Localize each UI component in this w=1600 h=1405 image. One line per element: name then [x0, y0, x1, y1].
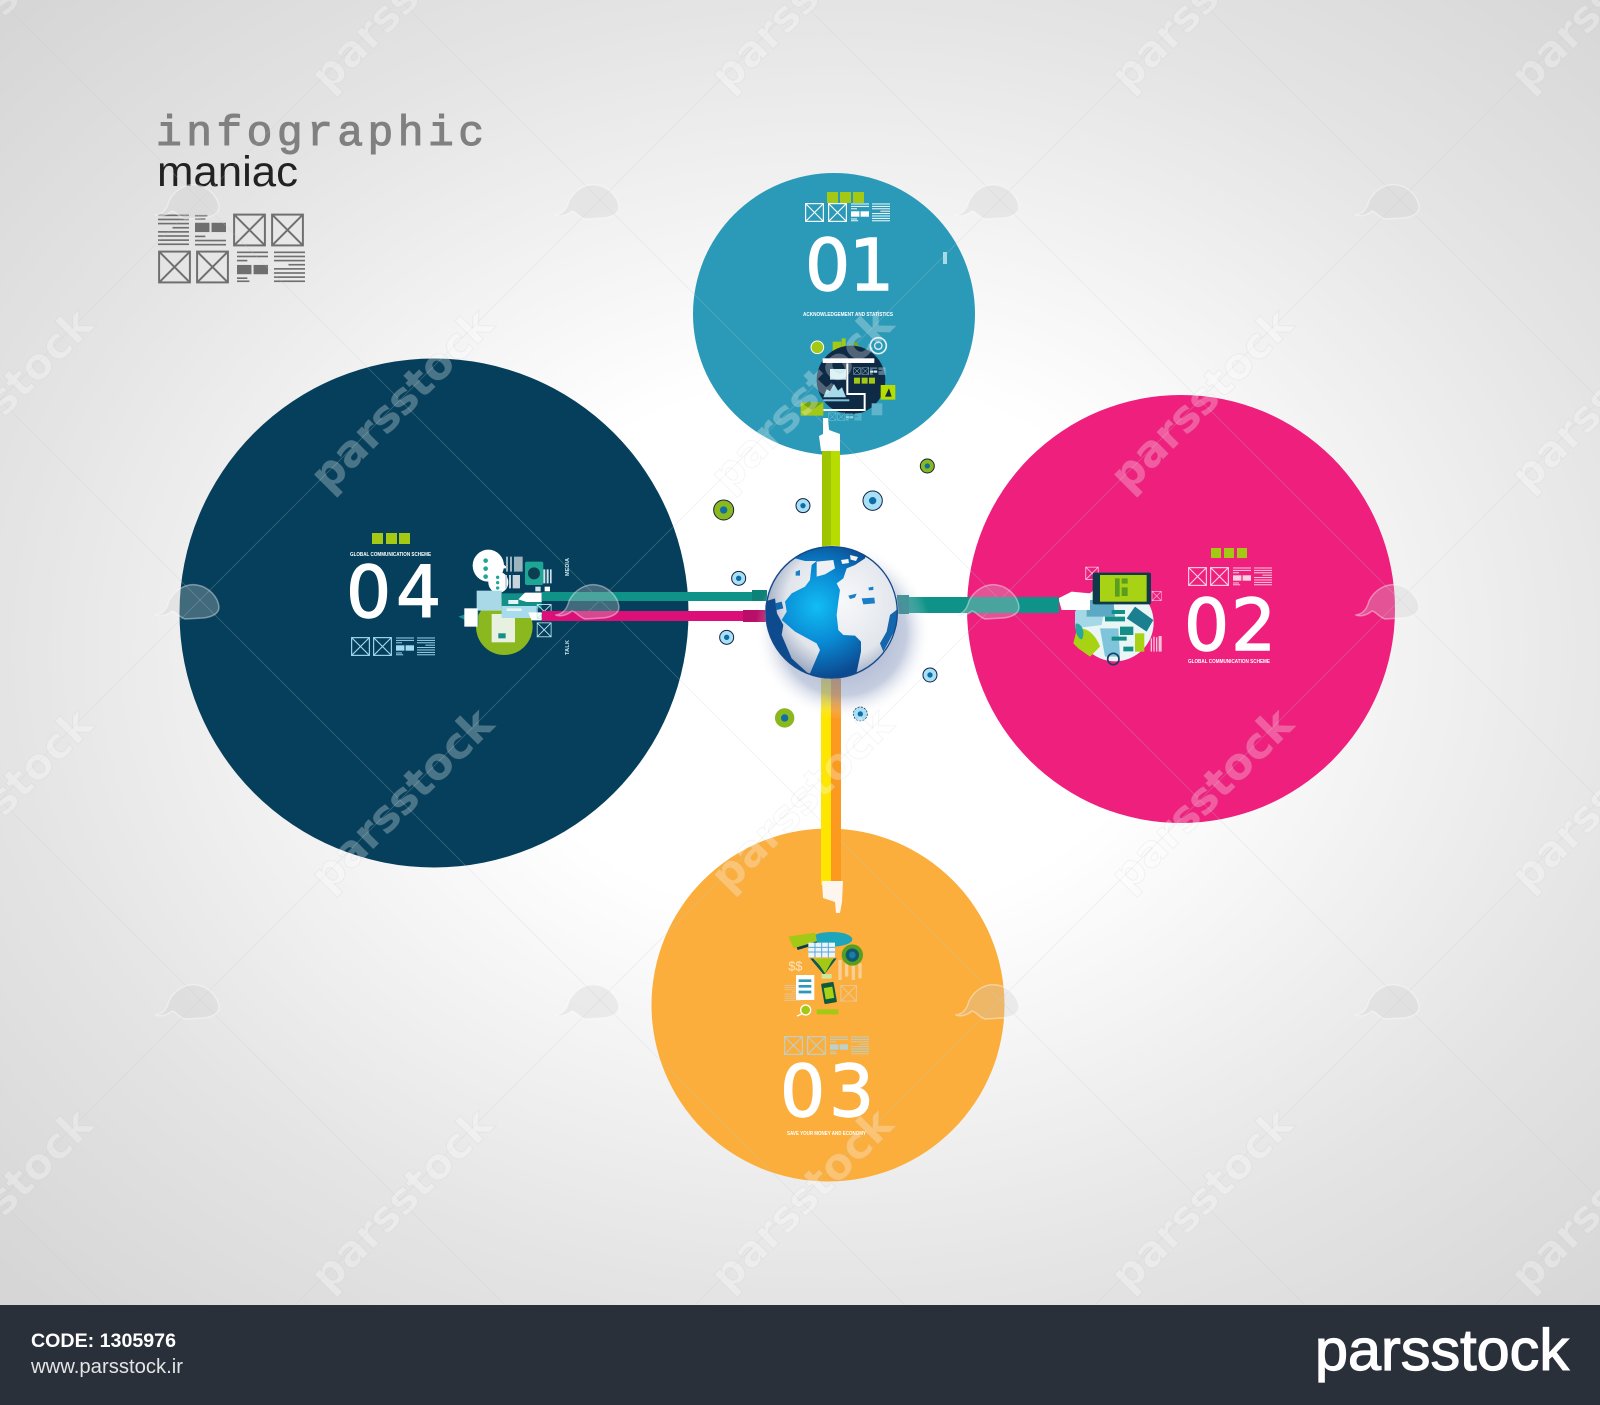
number 03: 3 [829, 1050, 874, 1133]
footer code: CODE: 1305976 [31, 1331, 176, 1352]
watermark: parsstock text: parsstock [301, 698, 504, 901]
panel: circle 02 [967, 395, 1395, 823]
globe shadow [755, 544, 931, 720]
globe [755, 544, 931, 720]
label: TALK: TALK [565, 640, 571, 655]
number 02: 2 [1231, 584, 1276, 667]
content: circle 02 [897, 548, 1276, 667]
watermark: parsstock text: parsstock [1101, 698, 1304, 901]
number 01: 1 [849, 224, 894, 307]
caption: ACKNOWLEDGEMENT AND STATISTICS [803, 312, 893, 318]
panel: circle 04 [180, 358, 688, 868]
panel: circle 01 [693, 173, 975, 455]
content: circle 01 [801, 192, 947, 451]
dot: blue bottom [853, 707, 867, 721]
icon: pointing hand up [819, 418, 840, 451]
globe sphere [764, 545, 898, 680]
dot: blue lower right [923, 668, 937, 682]
dot: blue lower left [720, 630, 734, 644]
connector: yellow and orange bar down [821, 675, 841, 885]
icon cluster: finance: $$ [788, 960, 802, 974]
icon cluster: charts on dark circle [801, 338, 895, 420]
caption: GLOBAL COMMUNICATION SCHEME [350, 552, 431, 558]
watermark: parsstock text: parsstock [701, 698, 904, 901]
green squares [372, 533, 410, 544]
icon cluster: media [458, 550, 552, 655]
watermark: parsstock text: parsstock [701, 1098, 904, 1301]
icon: teal sleeve and bar [897, 595, 1059, 614]
panel: circle 03 [652, 828, 1004, 1182]
label: MEDIA: MEDIA [565, 558, 571, 576]
dot: blue large [863, 491, 882, 510]
dot: green small [920, 459, 934, 473]
tick [943, 252, 947, 264]
title: infographic maniac [156, 109, 484, 196]
decorative dots [714, 459, 937, 728]
content: circle 04 [346, 533, 571, 655]
green squares [1211, 548, 1247, 558]
wireframe row [352, 638, 435, 655]
watermark: parsstock text: parsstock [1101, 298, 1304, 501]
green squares [827, 192, 864, 203]
icon cluster: finance [784, 932, 863, 1016]
dot: blue [796, 499, 810, 513]
number 02: 0 [1184, 584, 1229, 667]
footer url: www.parsstock.ir [30, 1356, 183, 1378]
watermark: parsstock text: parsstock [1101, 1098, 1304, 1301]
watermark: parsstock text: parsstock [301, 298, 504, 501]
connector: green bar up [822, 450, 840, 550]
dot: blue left [732, 571, 746, 585]
dot: green bottom [775, 708, 795, 728]
connector: teal and pink bars left [542, 590, 767, 622]
title line: maniac: maniac [157, 148, 298, 196]
wireframe row [806, 204, 890, 221]
watermark: parsstock text: parsstock [701, 298, 904, 501]
number 04: 4 [396, 551, 441, 634]
content: circle 03 [780, 881, 874, 1137]
icon cluster: globe and tablet [1058, 567, 1162, 665]
wireframe icon grid [158, 214, 305, 282]
watermark: parsstock text: parsstock [301, 1098, 504, 1301]
wireframe row [785, 1036, 869, 1054]
caption: GLOBAL COMMUNICATION SCHEME [1188, 659, 1270, 665]
caption: SAVE YOUR MONEY AND ECONOMY [787, 1131, 866, 1137]
number 04: 0 [346, 551, 391, 634]
wireframe row [1189, 568, 1272, 585]
dot: green [714, 500, 734, 520]
title line: infographic: infographic [156, 109, 484, 158]
icon: pointing hand down [822, 881, 843, 913]
footer bar [0, 1305, 1600, 1405]
footer logo: parsstock [1315, 1318, 1570, 1383]
number 01: 0 [805, 224, 850, 307]
watermark: bull marks [156, 185, 1419, 1019]
number 03: 0 [780, 1050, 825, 1133]
